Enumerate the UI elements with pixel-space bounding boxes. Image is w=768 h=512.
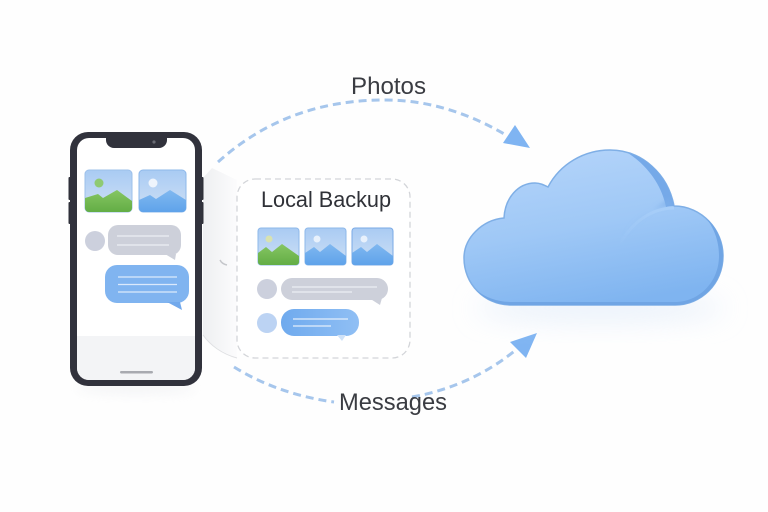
message row: blue bbox=[257, 309, 359, 341]
arrow: Messages arc bbox=[234, 333, 537, 402]
label: Messages: Messages bbox=[339, 389, 447, 416]
bubble: blue message bbox=[105, 265, 189, 310]
message row: gray bbox=[257, 278, 388, 305]
bubble: gray message bbox=[108, 225, 181, 260]
photo: blue landscape bbox=[139, 170, 186, 212]
thumbnail: blue landscape bbox=[305, 228, 346, 265]
arrow: Photos arc bbox=[218, 100, 530, 162]
thumbnail: blue landscape bbox=[352, 228, 393, 265]
photo: green landscape bbox=[85, 170, 132, 212]
icon: phone bbox=[68, 132, 204, 393]
cloud right rim bbox=[476, 218, 723, 305]
avatar: gray bbox=[85, 231, 105, 251]
cloud seam shadow bbox=[620, 199, 674, 242]
thumbnail: green landscape bbox=[258, 228, 299, 265]
cloud dark rim bbox=[628, 153, 674, 207]
shaded fold behind panel bbox=[203, 168, 237, 358]
cloud seam highlight bbox=[620, 208, 674, 244]
panel: Local Backup bbox=[203, 168, 410, 358]
label: Photos: Photos bbox=[351, 73, 426, 100]
icon: cloud bbox=[464, 150, 725, 320]
heading: Local Backup: Local Backup bbox=[261, 187, 391, 212]
